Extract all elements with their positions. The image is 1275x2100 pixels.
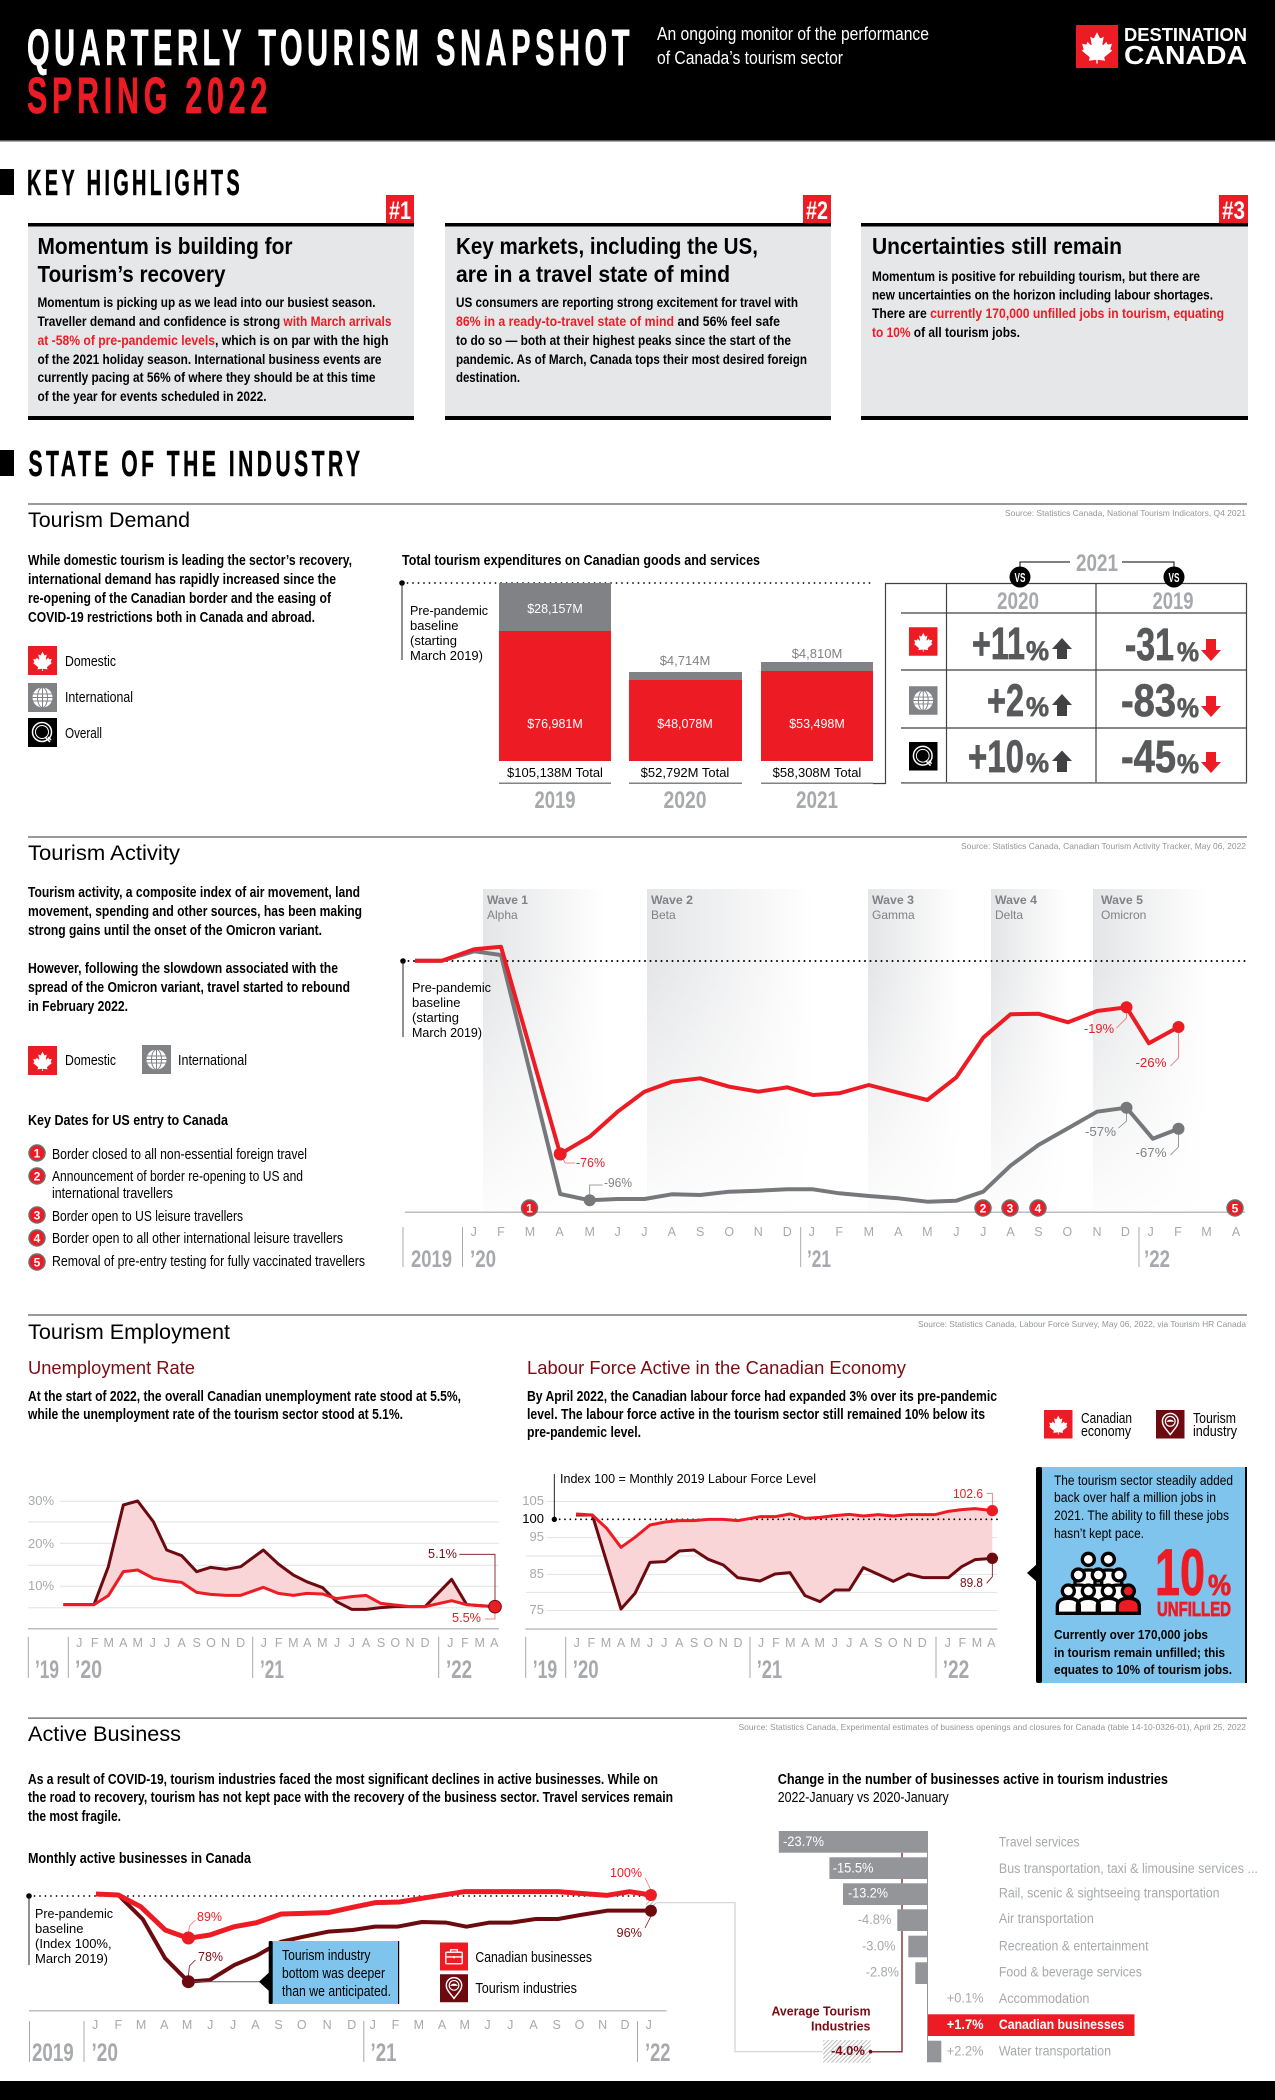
labour force text: By April 2022, the Canadian labour force had expanded 3% over its pre-pandemic <box>527 1389 997 1405</box>
card text: 86% in a ready-to-travel state of mind and 56% feel safe <box>456 313 780 329</box>
time axis labels: ’22 <box>943 1656 969 1684</box>
date markers on axis <box>522 1200 1243 1216</box>
wave bands: Delta <box>995 908 1023 922</box>
row: international <box>909 675 1221 726</box>
time axis labels <box>28 1636 499 1684</box>
bar 2019: $76,981M <box>527 717 583 731</box>
bar 2021: 2021 <box>796 787 838 814</box>
value labels: -4.8% <box>858 1912 891 1927</box>
line chart: labour force: Index 100 = Monthly 2019 Labour Force Level <box>560 1471 816 1486</box>
data labels: -76% <box>576 1156 605 1170</box>
callout text: The tourism sector steadily added <box>1054 1473 1233 1488</box>
card text: Traveller demand and confidence is strong with March arrivals <box>38 313 392 329</box>
time axis labels: ’21 <box>807 1246 831 1273</box>
date markers on axis: 1 <box>526 1202 533 1216</box>
unemployment text <box>27 1389 461 1423</box>
legend <box>440 1942 592 2002</box>
wave bands: Wave 4 <box>995 893 1037 907</box>
data labels: -19% <box>1084 1022 1114 1036</box>
card text <box>456 294 807 385</box>
value labels <box>783 1834 984 2059</box>
value labels: -2.8% <box>866 1965 899 1980</box>
callout conclusion: in tourism remain unfilled; this <box>1054 1645 1225 1660</box>
data labels: 89% <box>197 1909 222 1924</box>
row: overall: % <box>1177 749 1199 779</box>
unemployment text: while the unemployment rate of the tourism sector stood at 5.1%. <box>27 1407 403 1423</box>
card text: destination. <box>456 369 520 385</box>
wave bands: Wave 2 <box>651 893 693 907</box>
card text: of the 2021 holiday season. International business events are <box>38 351 382 367</box>
time axis labels: ’22 <box>1144 1246 1170 1273</box>
canadian line <box>63 1570 495 1607</box>
date 2 <box>29 1168 303 1202</box>
wave bands: Wave 1 <box>487 893 528 907</box>
category labels: Air transportation <box>999 1911 1094 1926</box>
time axis labels: JFMAMJJASONDJFMAMJJASONDJ <box>92 2018 652 2032</box>
chart heading <box>778 1772 1168 1806</box>
logo: Destination Canada: CANADA <box>1124 40 1247 70</box>
intro text <box>28 1772 673 1825</box>
column headers: 2019 <box>1152 588 1194 615</box>
section title: Tourism Demand <box>28 508 190 532</box>
chart heading: 2022-January vs 2020-January <box>778 1790 949 1806</box>
legend <box>28 1045 247 1075</box>
tourism industries line <box>96 1894 651 1982</box>
shaded gap <box>63 1501 495 1609</box>
callout text: hasn’t kept pace. <box>1054 1526 1144 1541</box>
card heading <box>456 233 758 287</box>
column headers <box>997 588 1194 615</box>
intro text: movement, spending and other sources, has been making <box>28 904 362 920</box>
legend: Overall <box>65 726 102 742</box>
section: tourism demand <box>28 504 1247 814</box>
intro text <box>28 885 362 1015</box>
bar 2019: 2019 <box>534 787 576 814</box>
baseline note: (starting <box>410 633 457 648</box>
header description: An ongoing monitor of the performance <box>657 24 929 44</box>
time axis labels: ’21 <box>260 1656 284 1684</box>
legend: International <box>65 690 133 706</box>
intro text: re-opening of the Canadian border and the easing of <box>28 591 331 607</box>
source: Source: Statistics Canada, Canadian Tourism Activity Tracker, May 06, 2022 <box>961 841 1246 851</box>
row: domestic: -31 <box>1125 619 1174 670</box>
heading: unemployment rate: Unemployment Rate <box>28 1358 195 1378</box>
date 3: 3 <box>34 1208 41 1222</box>
card text: to do so — both at their highest peaks since the start of the <box>456 332 791 348</box>
legend: Tourism industries <box>475 1981 577 1997</box>
wave bands: Beta <box>651 908 676 922</box>
date 3 <box>29 1207 243 1225</box>
callout text: back over half a million jobs in <box>1054 1490 1216 1505</box>
time axis labels: ’20 <box>470 1246 496 1273</box>
header description <box>657 24 929 68</box>
legend: Domestic <box>65 1053 116 1069</box>
date markers on axis: 3 <box>1007 1202 1014 1216</box>
stat: 10% unfilled: 10 <box>1155 1535 1205 1609</box>
panel: highlight 3 <box>861 195 1248 420</box>
category labels: Recreation & entertainment <box>999 1939 1149 1954</box>
line chart: unemployment rate: 10% <box>28 1578 54 1593</box>
baseline note: (starting <box>412 1010 459 1025</box>
category labels: Rail, scenic & sightseeing transportation <box>999 1886 1220 1901</box>
baseline note: Pre-pandemic <box>412 980 491 995</box>
key dates list <box>28 1113 365 1270</box>
row: international: % <box>1177 693 1199 723</box>
callout conclusion <box>1054 1627 1232 1677</box>
intro text <box>28 553 352 626</box>
time axis labels <box>30 2018 670 2067</box>
stat: 10% unfilled: % <box>1208 1570 1231 1602</box>
unemployment text: At the start of 2022, the overall Canadian unemployment rate stood at 5.5%, <box>28 1389 461 1405</box>
badge #3: #3 <box>1222 197 1245 225</box>
data labels: -57% <box>1085 1125 1116 1139</box>
data labels: 96% <box>616 1925 642 1940</box>
legend: employment <box>1044 1410 1238 1440</box>
card heading: Key markets, including the US, <box>456 233 758 259</box>
callout: deeper bottom <box>194 1941 399 2004</box>
2021 comparison bracket: VS <box>1168 570 1180 585</box>
bars <box>779 1831 941 2062</box>
line chart: labour force: 105 <box>522 1493 544 1508</box>
bar 2021: $53,498M <box>789 717 845 731</box>
time axis labels: JFMAMJJASONDJFMAMJJASONDJFMA <box>471 1225 1241 1239</box>
bar 2020: $4,714M <box>660 653 710 668</box>
card text: Momentum is positive for rebuilding tourism, but there are <box>872 268 1200 284</box>
logo: Destination Canada <box>1076 25 1247 70</box>
bar chart: expenditures <box>499 583 873 814</box>
panel: highlight 1 <box>28 195 414 420</box>
baseline note: Pre-pandemic <box>35 1906 113 1921</box>
line chart: labour force: 75 <box>530 1602 544 1617</box>
heading: state of the industry: STATE OF THE INDUSTRY <box>28 443 364 484</box>
value labels: -15.5% <box>833 1861 874 1876</box>
value labels: +0.1% <box>947 1991 984 2006</box>
value labels: +1.7% <box>947 2017 984 2032</box>
category labels: Travel services <box>999 1835 1080 1850</box>
data labels <box>554 1001 1184 1206</box>
badge #1: #1 <box>389 197 411 225</box>
bar 2020: 2020 <box>664 787 706 814</box>
labour force text <box>527 1389 997 1441</box>
card heading: are in a travel state of mind <box>456 261 730 287</box>
source: Source: Statistics Canada, Experimental estimates of business openings and closures for Canada (table 14-10-0326-01), April 25, 2022 <box>738 1722 1246 1732</box>
baseline note <box>26 1893 651 1966</box>
chart heading: Monthly active businesses in Canada <box>28 1851 252 1867</box>
time axis labels: JFMAMJJASONDJFMAMJJASONDJFMA <box>76 1636 499 1650</box>
legend: employment: economy <box>1081 1424 1132 1440</box>
date 2: international travellers <box>52 1186 173 1202</box>
wave bands <box>483 889 1245 1212</box>
stat: 10% unfilled: UNFILLED <box>1157 1599 1231 1621</box>
row: domestic: +11 <box>972 618 1025 669</box>
card text: currently pacing at 56% of where they should be at this time <box>38 369 376 385</box>
row: domestic: % <box>1026 636 1049 666</box>
wave bands: Alpha <box>487 908 518 922</box>
callout conclusion: equates to 10% of tourism jobs. <box>1054 1662 1232 1677</box>
axis line <box>405 1212 1245 1213</box>
intro text: While domestic tourism is leading the sector’s recovery, <box>28 553 352 569</box>
average tourism industries: -4.0% <box>831 2043 865 2058</box>
row: overall: % <box>1026 748 1049 778</box>
line chart: labour force: 89.8 <box>960 1575 983 1590</box>
connector to bar chart <box>651 1903 823 2052</box>
card text: at -58% of pre-pandemic levels, which is on par with the high <box>38 332 388 348</box>
line chart: labour force: 100 <box>522 1511 544 1526</box>
baseline note: baseline <box>412 995 460 1010</box>
card text: of the year for events scheduled in 2022. <box>38 388 266 404</box>
bar 2019 <box>499 583 611 814</box>
card heading <box>38 233 293 287</box>
data labels: -96% <box>604 1176 632 1190</box>
tourism line <box>63 1501 495 1609</box>
bar 2020: $52,792M Total <box>641 765 729 780</box>
baseline note: baseline <box>410 618 458 633</box>
2021 comparison bracket: 2021 <box>1076 550 1118 577</box>
average tourism industries <box>772 2005 872 2063</box>
line chart: unemployment rate: 30% <box>28 1493 54 1508</box>
card text: US consumers are reporting strong excitement for travel with <box>456 294 798 310</box>
row: domestic: % <box>1177 637 1199 667</box>
row: overall: +10 <box>968 731 1024 782</box>
card heading: Momentum is building for <box>38 233 293 259</box>
heading: labour force: Labour Force Active in the Canadian Economy <box>527 1358 906 1378</box>
panel: highlight 2 <box>445 195 831 420</box>
category labels: Canadian businesses <box>999 2017 1124 2032</box>
category labels <box>999 1835 1258 2059</box>
baseline note: March 2019) <box>35 1951 108 1966</box>
intro text: Tourism activity, a composite index of air movement, land <box>28 885 360 901</box>
value labels: +2.2% <box>947 2044 984 2059</box>
date 1: Border closed to all non-essential foreign travel <box>52 1147 307 1163</box>
card heading: Uncertainties still remain <box>872 233 1122 259</box>
callout text <box>1054 1473 1233 1541</box>
callout: deeper bottom: bottom was deeper <box>282 1966 385 1982</box>
baseline note: baseline <box>35 1921 83 1936</box>
wave bands: Wave 5 <box>1101 893 1143 907</box>
average tourism industries: Average Tourism <box>772 2005 870 2019</box>
callout: unfilled jobs <box>1027 1467 1247 1683</box>
card heading: Tourism’s recovery <box>38 261 226 287</box>
time axis labels: ’20 <box>92 2039 118 2067</box>
card text <box>38 294 392 404</box>
value labels: -13.2% <box>848 1886 888 1901</box>
row: overall <box>909 731 1221 782</box>
time axis labels: JFMAMJJASONDJFMAMJJASONDJFMA <box>574 1636 996 1650</box>
date 5: 5 <box>34 1256 41 1270</box>
intro text: international demand has rapidly increased since the <box>28 572 336 588</box>
date 4: Border open to all other international leisure travellers <box>52 1231 343 1247</box>
time axis labels: 2019 <box>411 1246 452 1273</box>
callout text: 2021. The ability to fill these jobs <box>1054 1508 1229 1523</box>
line chart: tourism activity <box>400 889 1245 1273</box>
line chart: unemployment rate: 5.1% <box>428 1546 457 1561</box>
heading: state of the industry <box>0 443 364 484</box>
time axis labels: ’22 <box>446 1656 472 1684</box>
date markers on axis: 2 <box>980 1202 987 1216</box>
line chart: unemployment rate <box>28 1493 501 1684</box>
date markers on axis: 5 <box>1232 1202 1239 1216</box>
source: Source: Statistics Canada, National Tourism Indicators, Q4 2021 <box>1005 508 1246 518</box>
baseline note <box>399 580 873 663</box>
tourism line <box>576 1515 992 1609</box>
international line <box>415 951 1178 1202</box>
header banner <box>0 0 1275 142</box>
header description: of Canada’s tourism sector <box>657 48 843 68</box>
legend: employment: Canadian <box>1081 1411 1132 1427</box>
line chart: unemployment rate: 20% <box>28 1536 54 1551</box>
bar 2021: $4,810M <box>792 646 842 661</box>
wave bands: Gamma <box>872 908 915 922</box>
heading: key highlights: KEY HIGHLIGHTS <box>27 162 243 203</box>
baseline note <box>400 958 1245 1040</box>
row: international: % <box>1026 692 1049 722</box>
line chart: labour force <box>522 1471 998 1684</box>
baseline note: March 2019) <box>412 1025 482 1040</box>
section title: Tourism Activity <box>28 841 180 865</box>
data labels <box>182 1865 657 1988</box>
card text: pandemic. As of March, Canada tops their most desired foreign <box>456 351 807 367</box>
time axis labels: ’21 <box>370 2039 397 2067</box>
canadian businesses line <box>96 1892 651 1938</box>
shaded gap <box>576 1509 992 1609</box>
category labels: Bus transportation, taxi & limousine services ... <box>999 1861 1258 1876</box>
data labels: -67% <box>1136 1146 1166 1160</box>
legend: Canadian businesses <box>475 1950 592 1966</box>
card text <box>872 268 1224 340</box>
time axis labels: ’19 <box>533 1656 557 1684</box>
callout conclusion: Currently over 170,000 jobs <box>1054 1627 1208 1642</box>
intro text: spread of the Omicron variant, travel started to rebound <box>28 980 350 996</box>
date 2: Announcement of border re-opening to US and <box>52 1169 303 1185</box>
category labels: Accommodation <box>999 1991 1089 2006</box>
intro text: the most fragile. <box>28 1809 121 1825</box>
data labels: 78% <box>198 1949 223 1964</box>
date 3: Border open to US leisure travellers <box>52 1209 243 1225</box>
badge #2: #2 <box>806 197 828 225</box>
wave bands: Wave 3 <box>872 893 914 907</box>
baseline note: March 2019) <box>410 648 483 663</box>
card text: There are currently 170,000 unfilled jobs in tourism, equating <box>872 305 1224 321</box>
average tourism industries: Industries <box>811 2020 871 2034</box>
key dates heading: Key Dates for US entry to Canada <box>28 1113 229 1129</box>
line chart: labour force: 102.6 <box>953 1486 983 1501</box>
time axis labels: ’20 <box>75 1656 102 1684</box>
bar 2020 <box>629 653 742 814</box>
bar chart: change in businesses <box>772 1772 1258 2063</box>
card text: Momentum is picking up as we lead into our busiest season. <box>38 294 376 310</box>
line chart: unemployment rate: 5.5% <box>452 1610 481 1625</box>
data labels: -26% <box>1136 1056 1166 1070</box>
line chart: labour force: 85 <box>530 1566 544 1581</box>
legend: employment: Tourism <box>1193 1411 1236 1427</box>
date 2: 2 <box>34 1170 41 1184</box>
footer band <box>0 2081 1275 2100</box>
category labels: Food & beverage services <box>999 1965 1142 1980</box>
chart heading: Change in the number of businesses active in tourism industries <box>778 1772 1168 1788</box>
labour force text: pre-pandemic level. <box>527 1425 641 1441</box>
legend: International <box>178 1053 247 1069</box>
comparison table <box>873 550 1247 784</box>
date markers on axis: 4 <box>1035 1202 1042 1216</box>
row: domestic <box>909 618 1221 670</box>
card text: new uncertainties on the horizon including labour shortages. <box>872 286 1213 302</box>
time axis labels: ’21 <box>757 1656 782 1684</box>
value labels: -3.0% <box>862 1939 896 1954</box>
time axis labels <box>526 1636 996 1684</box>
baseline note: Pre-pandemic <box>410 603 488 618</box>
line chart: monthly active businesses <box>26 1865 823 2067</box>
2021 comparison bracket <box>1010 550 1184 588</box>
date 1: 1 <box>34 1146 41 1160</box>
average marker line <box>870 1853 902 2052</box>
source: Source: Statistics Canada, Labour Force Survey, May 06, 2022, via Tourism HR Canada <box>918 1319 1246 1329</box>
date 5: Removal of pre-entry testing for fully vaccinated travellers <box>52 1254 365 1270</box>
time axis labels: ’20 <box>573 1656 599 1684</box>
title: QUARTERLY TOURISM SNAPSHOT <box>27 19 634 76</box>
subtitle: spring 2022: SPRING 2022 <box>27 67 272 124</box>
domestic line <box>415 947 1179 1154</box>
baseline note: (Index 100%, <box>35 1936 112 1951</box>
2021 comparison bracket: VS <box>1014 570 1026 585</box>
time axis labels: 2019 <box>32 2039 74 2067</box>
callout: deeper bottom: Tourism industry <box>282 1948 371 1964</box>
heading: key highlights <box>0 162 243 203</box>
chart heading: Total tourism expenditures on Canadian goods and services <box>402 553 760 569</box>
section title: Tourism Employment <box>28 1320 230 1344</box>
time axis labels: ’22 <box>645 2039 670 2067</box>
wave bands: Omicron <box>1101 908 1146 922</box>
callout: deeper bottom: than we anticipated. <box>282 1984 391 2000</box>
icon: people group <box>1057 1553 1139 1613</box>
section: tourism employment <box>27 1314 1247 1684</box>
card text: to 10% of all tourism jobs. <box>872 324 1020 340</box>
bar 2021: $58,308M Total <box>773 765 861 780</box>
column headers: 2020 <box>997 588 1039 615</box>
intro text: the road to recovery, tourism has not kept pace with the recovery of the business sector. Travel services remain <box>28 1790 673 1806</box>
section: tourism activity <box>28 836 1247 1273</box>
legend <box>28 646 133 747</box>
row: international: -83 <box>1121 675 1176 726</box>
bar 2021 <box>761 646 873 814</box>
legend: Domestic <box>65 654 116 670</box>
line chart: labour force: 95 <box>530 1529 544 1544</box>
intro text: As a result of COVID-19, tourism industries faced the most significant declines in active businesses. While on <box>28 1772 658 1788</box>
bar 2019: $105,138M Total <box>507 765 603 780</box>
intro text: COVID-19 restrictions both in Canada and abroad. <box>28 610 315 626</box>
intro text: strong gains until the onset of the Omicron variant. <box>28 923 322 939</box>
category labels: Water transportation <box>999 2044 1111 2059</box>
legend: employment: industry <box>1193 1424 1238 1440</box>
canadian line <box>576 1509 992 1547</box>
row: overall: -45 <box>1121 731 1176 782</box>
section title: Active Business <box>28 1722 181 1746</box>
logo: Destination Canada: DESTINATION <box>1124 25 1247 45</box>
bar 2019: $28,157M <box>527 602 583 616</box>
intro text: in February 2022. <box>28 999 128 1015</box>
bar 2020: $48,078M <box>657 717 713 731</box>
section: active business <box>26 1718 1258 2067</box>
labour force text: level. The labour force active in the tourism sector still remained 10% below its <box>527 1407 985 1423</box>
value labels: -23.7% <box>783 1834 824 1849</box>
data labels: 100% <box>610 1865 642 1880</box>
time axis labels <box>403 1225 1241 1273</box>
intro text: However, following the slowdown associated with the <box>28 961 338 977</box>
row: international: +2 <box>987 675 1024 726</box>
time axis labels: ’19 <box>35 1656 59 1684</box>
date 4: 4 <box>34 1232 41 1246</box>
